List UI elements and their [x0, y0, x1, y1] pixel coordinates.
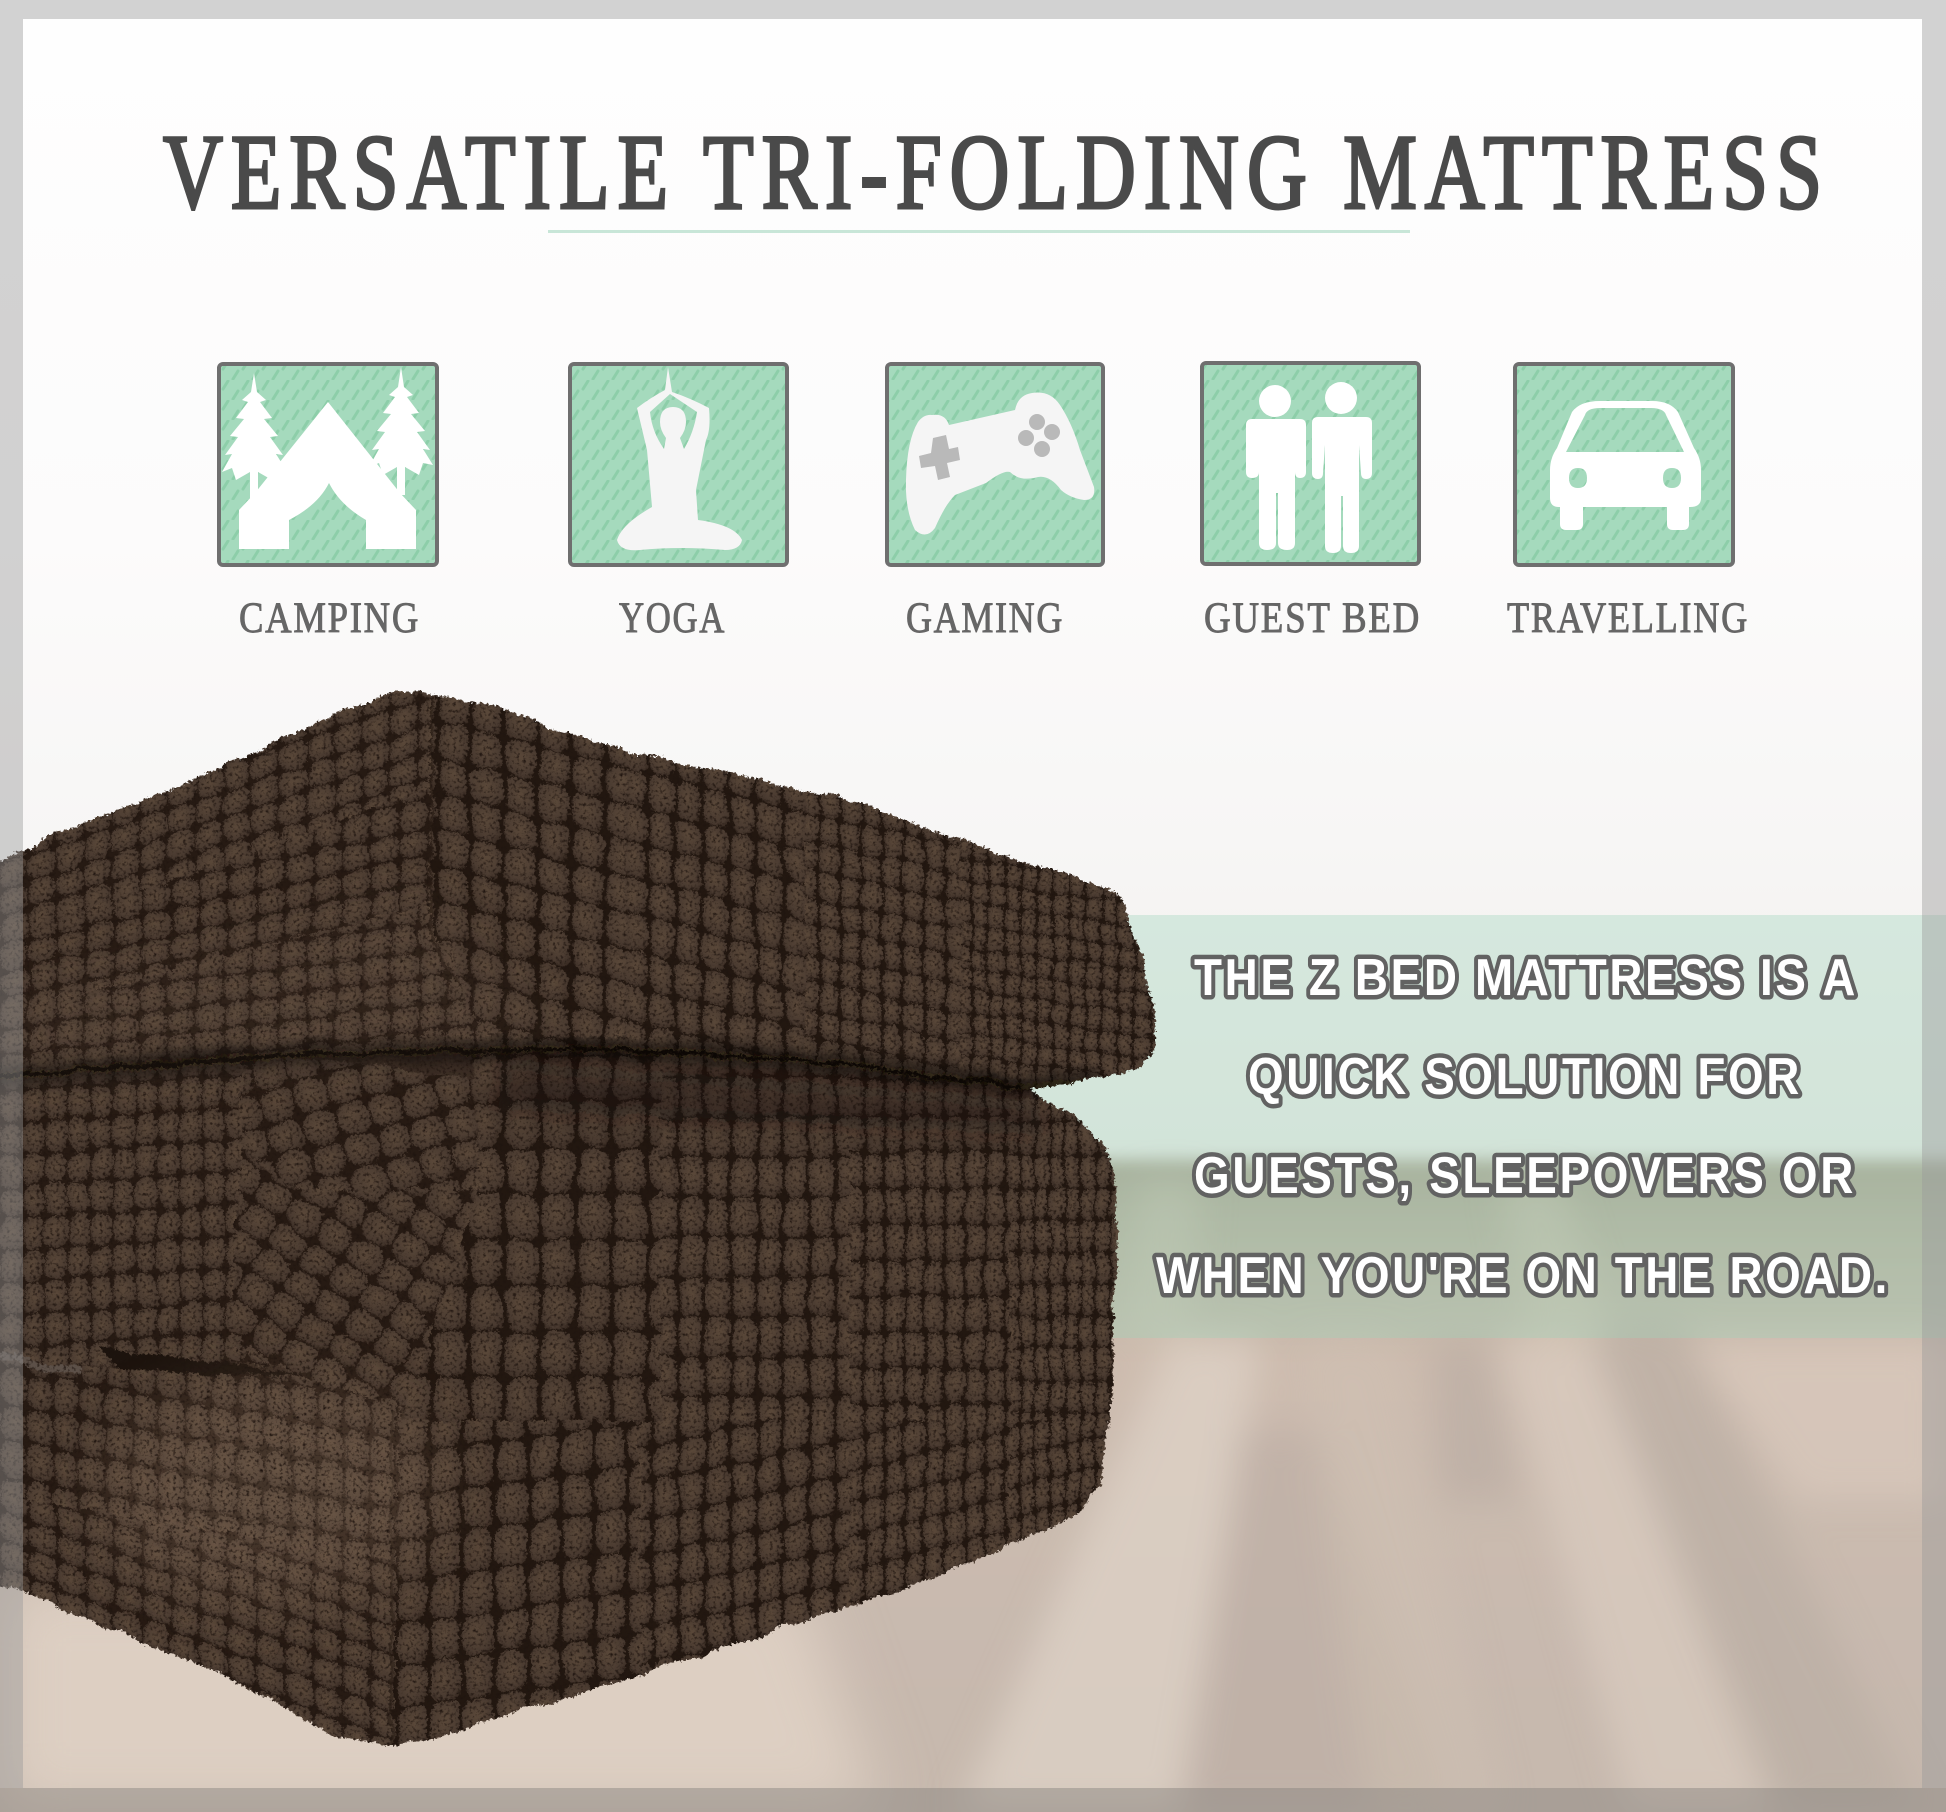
mattress: top cushion right face — [432, 670, 1165, 1086]
text block: banner message: GUESTS, SLEEPOVERS OR — [1194, 1147, 1856, 1205]
panel: gaming icon — [887, 364, 1103, 565]
label: camping: CAMPING — [239, 595, 420, 642]
label: yoga: YOGA — [619, 595, 726, 642]
title underline — [548, 230, 1410, 233]
panel: travelling icon — [1515, 364, 1733, 565]
panel: guest bed icon — [1202, 363, 1419, 564]
text block: banner message: QUICK SOLUTION FOR — [1248, 1048, 1802, 1106]
panel: yoga icon — [570, 364, 787, 565]
text block: banner message — [1156, 949, 1890, 1305]
product: folded brown tufted mattress — [0, 670, 1190, 1770]
label: gaming: GAMING — [906, 595, 1064, 642]
mattress: top cushion left face — [0, 670, 490, 1078]
panel: translucent green text banner background — [1000, 915, 1946, 1338]
mattress: shading crease between cushions — [0, 900, 1100, 1600]
text block: banner message: THE Z BED MATTRESS IS A — [1194, 949, 1858, 1007]
mattress: lower cushion right face — [391, 1040, 1140, 1770]
mattress: pocket fold and zipper — [0, 1345, 303, 1374]
label: guest bed: GUEST BED — [1204, 595, 1421, 642]
label: travelling: TRAVELLING — [1507, 595, 1749, 642]
mattress: lower cushion left face — [0, 1050, 490, 1770]
panel: camping icon — [219, 364, 437, 565]
